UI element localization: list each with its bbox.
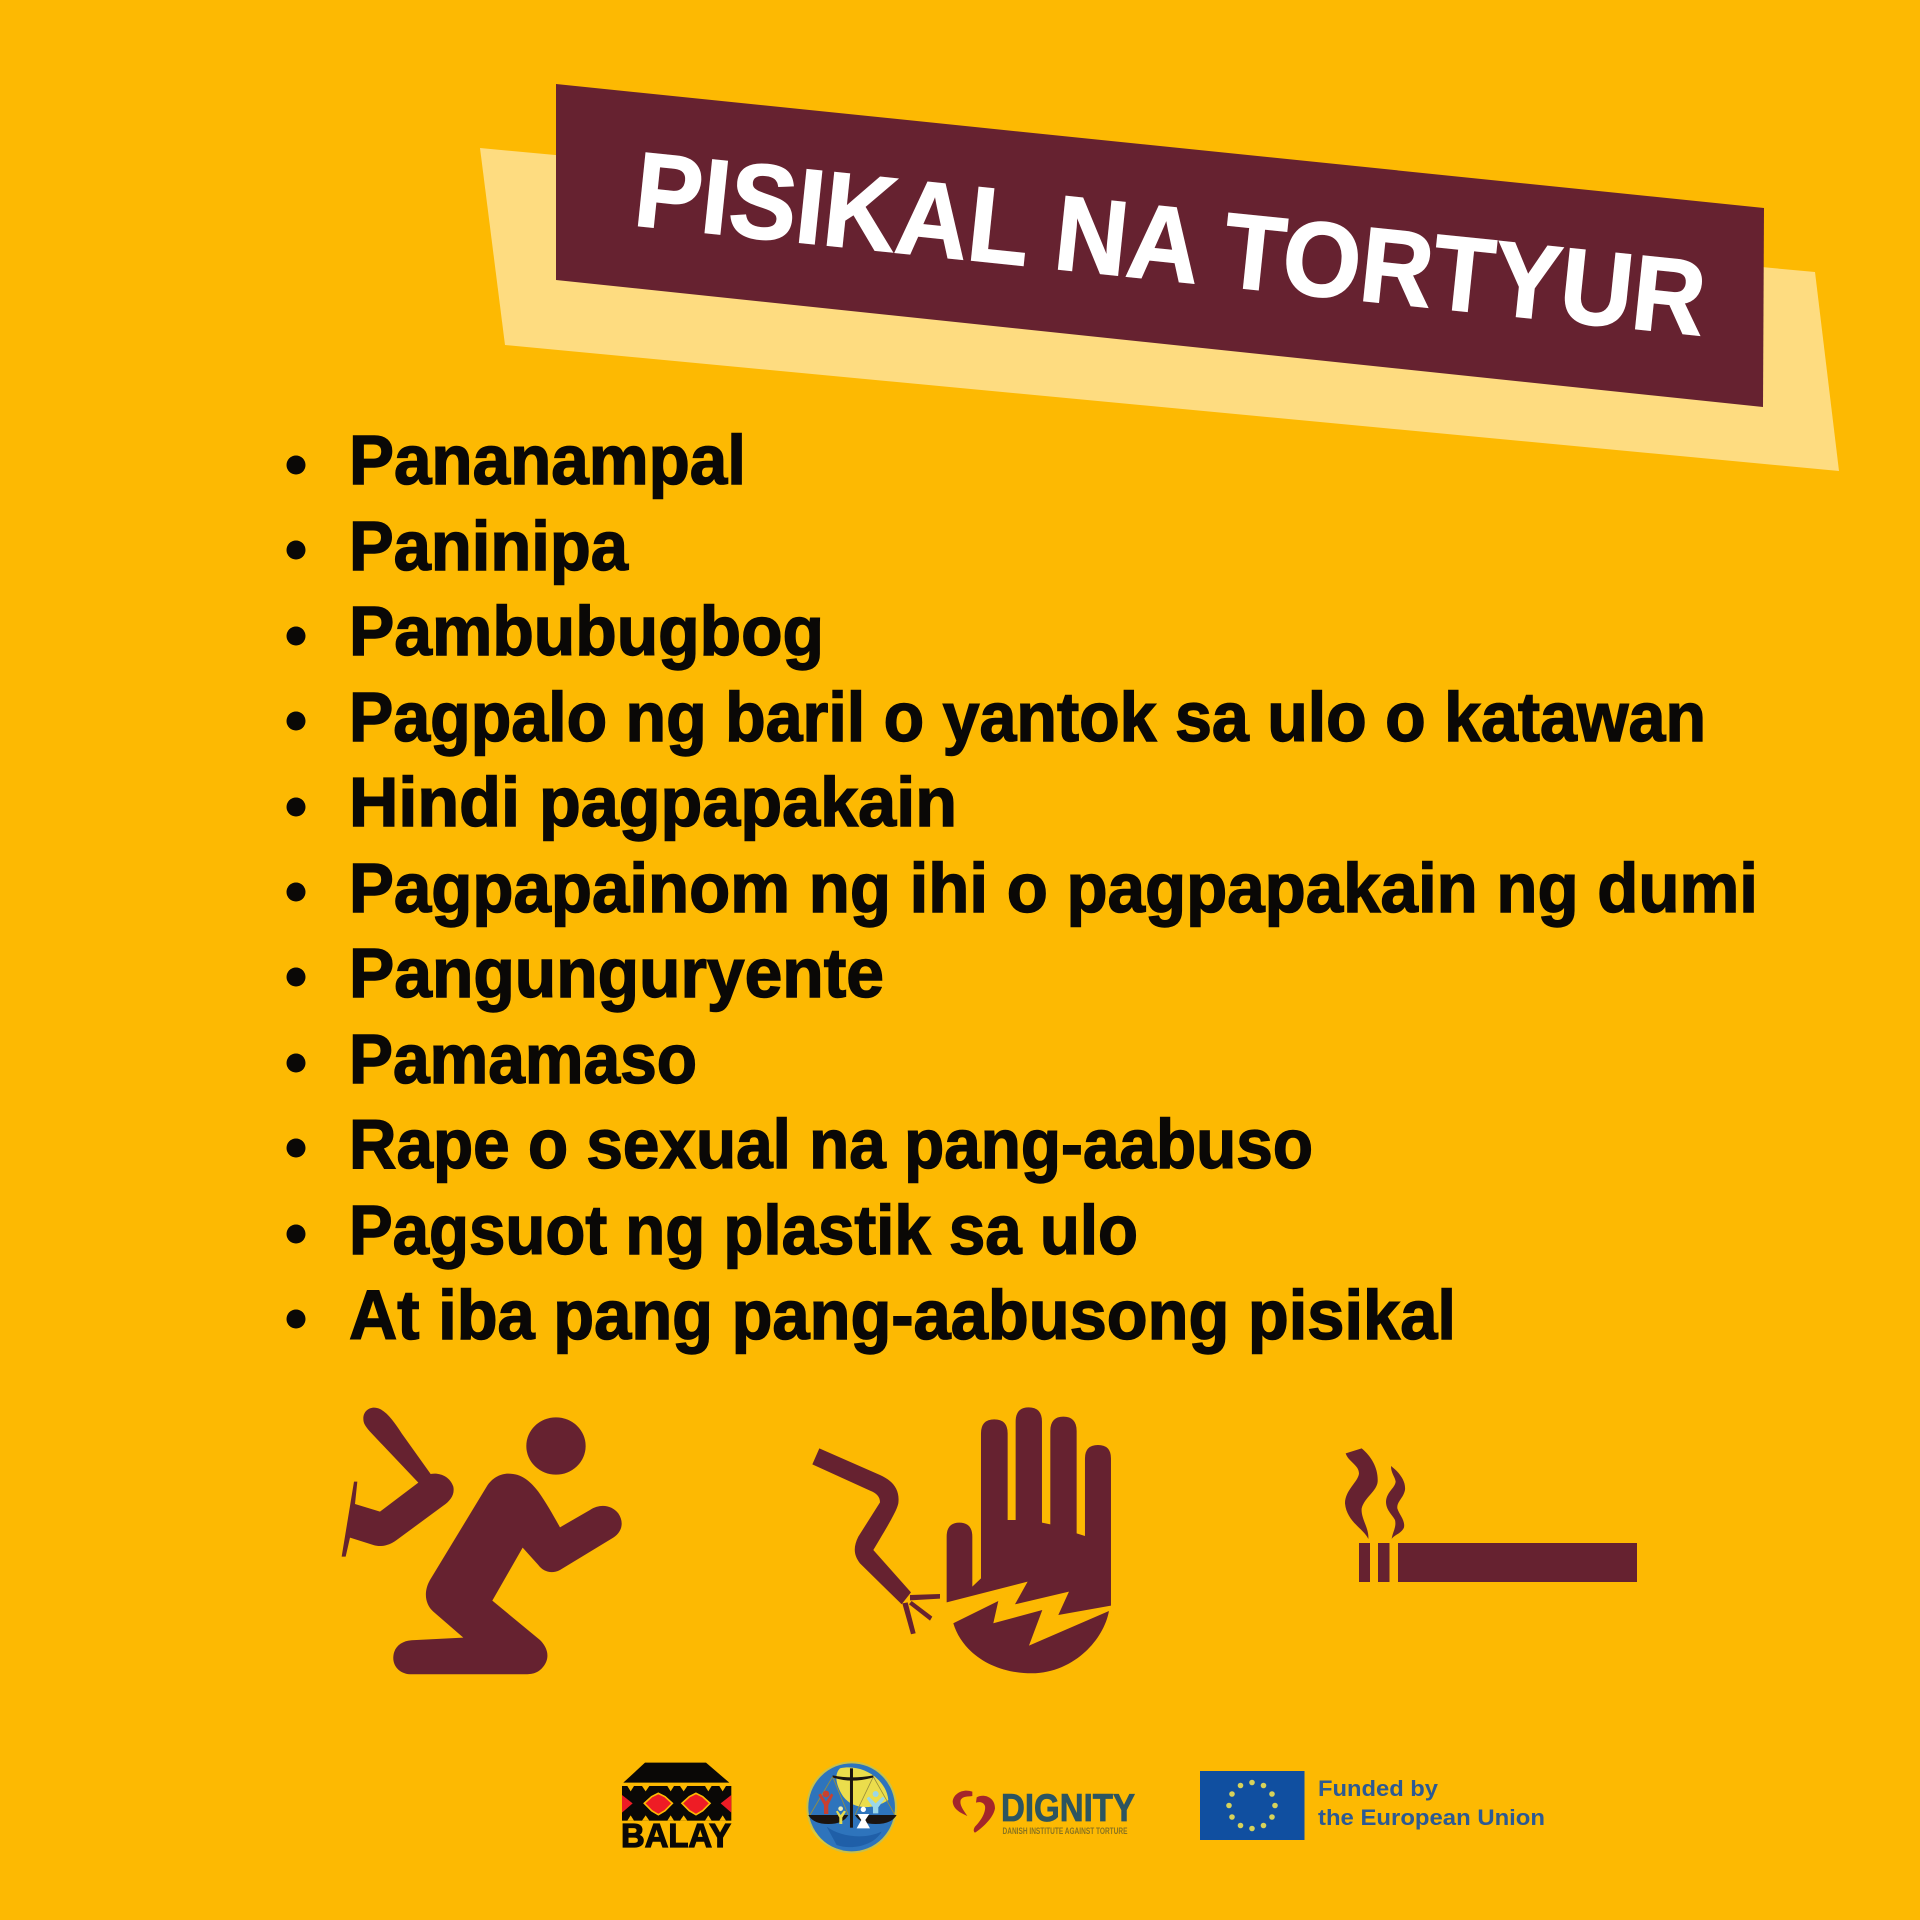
logo: Dignity xyxy=(953,1787,1135,1836)
list item: Pambubugbog xyxy=(349,592,824,670)
funding text: the European Union xyxy=(1318,1805,1545,1830)
list item: Paninipa xyxy=(349,507,629,585)
funding text: Funded by xyxy=(1318,1776,1439,1801)
list item: Pagpapainom ng ihi o pagpapakain ng dumi xyxy=(349,849,1758,927)
list of physical torture methods xyxy=(286,421,1758,1354)
logo: Dignity: DIGNITY xyxy=(1001,1787,1135,1830)
list item: Rape o sexual na pang-aabuso xyxy=(349,1105,1313,1183)
list item: Pamamaso xyxy=(349,1020,697,1098)
list item: At iba pang pang-aabusong pisikal xyxy=(349,1276,1456,1354)
list item: Pagpalo ng baril o yantok sa ulo o katawan xyxy=(349,678,1706,756)
title banner xyxy=(480,84,1839,471)
list item: Hindi pagpapakain xyxy=(349,763,957,841)
logo: Balay: BALAY xyxy=(621,1817,731,1854)
icon: live wire shocking a hand xyxy=(812,1407,1111,1673)
logo: European Union flag xyxy=(1200,1771,1545,1840)
logo: Dignity: DANISH INSTITUTE AGAINST TORTURE xyxy=(1002,1826,1128,1836)
logo: Balay xyxy=(621,1763,731,1854)
icon: kneeling person being hit with a club xyxy=(342,1408,622,1674)
list item: Pananampal xyxy=(349,421,746,499)
title text: PISIKAL NA TORTYUR xyxy=(630,131,1711,358)
list item: Pangunguryente xyxy=(349,934,884,1012)
logo: scales of justice on globe xyxy=(807,1762,897,1852)
funding text xyxy=(1318,1776,1545,1830)
icon: smoking cigarette xyxy=(1345,1448,1637,1582)
list item: Pagsuot ng plastik sa ulo xyxy=(349,1191,1138,1269)
